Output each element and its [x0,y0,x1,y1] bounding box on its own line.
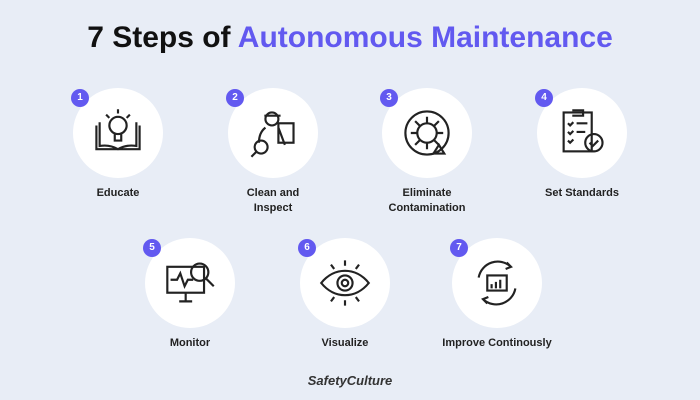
title: 7 Steps of Autonomous Maintenance [87,21,613,54]
icon: eye: 6 [304,242,310,253]
step 4: set standards: Set Standards [545,187,619,199]
step 1: educate [71,88,163,199]
step 7: improve continously [442,238,552,349]
step 5: monitor [143,238,235,349]
step 2: clean and inspect [226,88,318,214]
step 3: eliminate contamination: Contamination [388,202,466,214]
step 6: visualize: Visualize [322,337,368,349]
icon: inspector: 2 [232,92,238,103]
step 7: improve continously: Improve Continously [442,337,552,349]
step 3: eliminate contamination: Eliminate [403,187,451,199]
icon: bulb and book [73,88,163,178]
icon: cycle chart [452,238,542,328]
icon: bulb and book: 1 [77,92,83,103]
icon: clipboard badge: 4 [541,92,547,103]
icon: virus [382,88,472,178]
icon: inspector [228,88,318,178]
logo: SafetyCulture [308,373,392,388]
step 2: clean and inspect: Inspect [254,202,292,214]
icon: clipboard badge [537,88,627,178]
step 6: visualize [298,238,390,349]
icon: monitor [145,238,235,328]
step 3: eliminate contamination [380,88,472,214]
step 1: educate: Educate [97,187,139,199]
icon: cycle chart: 7 [456,242,462,253]
icon: eye [300,238,390,328]
step 2: clean and inspect: Clean and [247,187,299,199]
step 4: set standards [535,88,627,199]
icon: monitor: 5 [149,242,155,253]
icon: virus: 3 [386,92,392,103]
step 5: monitor: Monitor [170,337,210,349]
